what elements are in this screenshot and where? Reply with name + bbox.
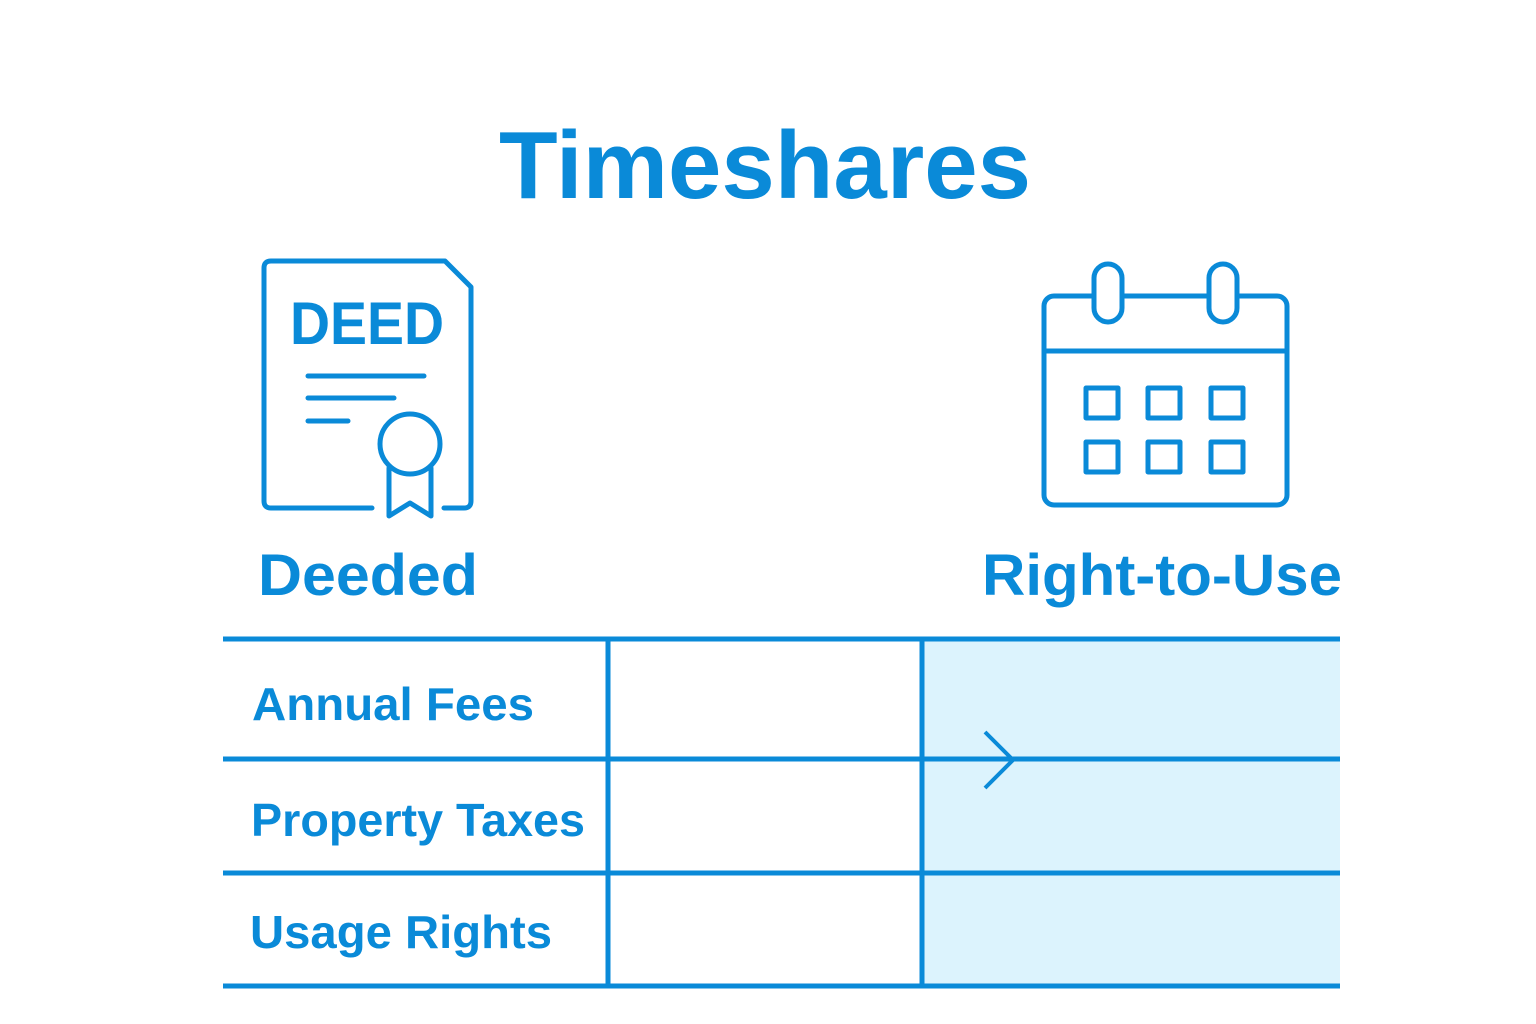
label: Right-to-Use: Right-to-Use bbox=[982, 543, 1342, 608]
title: Timeshares bbox=[499, 112, 1031, 219]
icon: calendar bbox=[1044, 264, 1287, 505]
icon: deed document: DEED bbox=[290, 290, 444, 357]
row label: Property Taxes: Property Taxes bbox=[251, 794, 585, 846]
label: Deeded: Deeded bbox=[258, 543, 478, 608]
comparison table bbox=[223, 639, 1340, 986]
icon: deed document bbox=[264, 261, 471, 516]
arrow chevron bbox=[985, 732, 1013, 788]
row label: Annual Fees: Annual Fees bbox=[252, 678, 534, 730]
row label: Usage Rights: Usage Rights bbox=[250, 906, 552, 958]
